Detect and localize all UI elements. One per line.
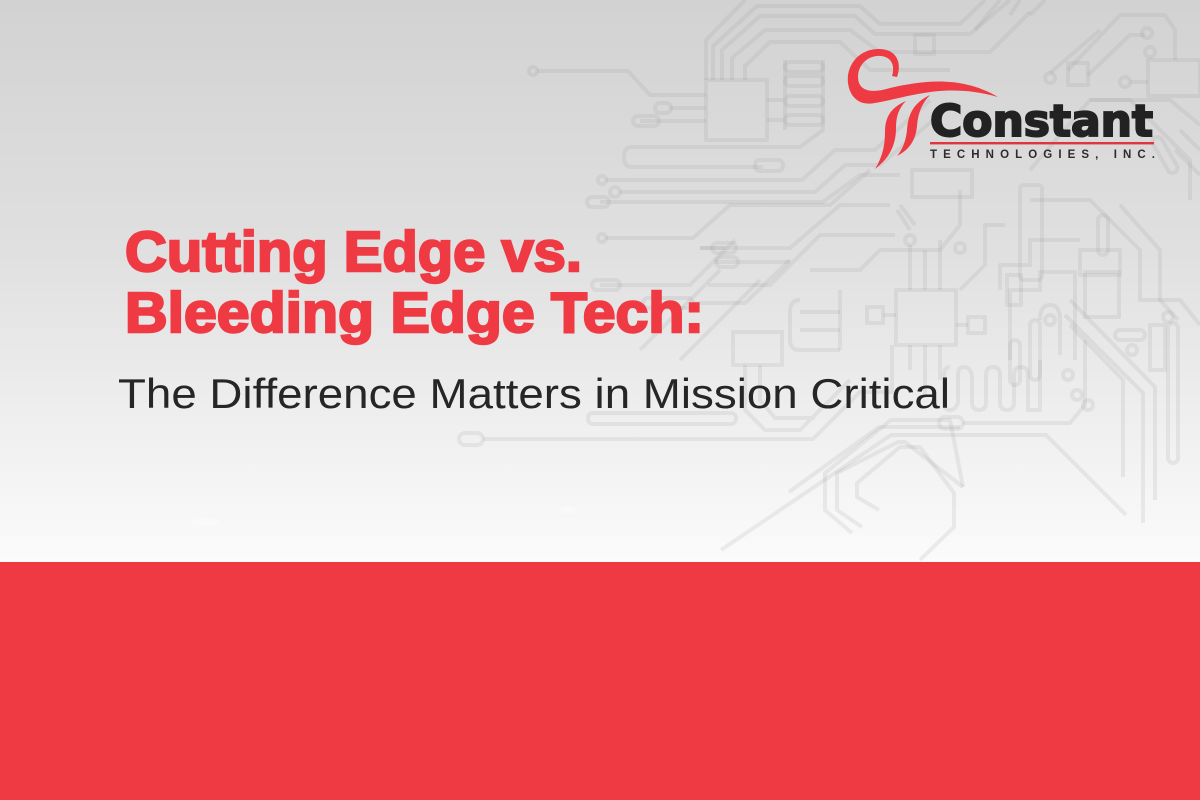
- subtitle: The Difference Matters in Mission Critical: [118, 370, 950, 417]
- logo tagline: TECHNOLOGIES, INC.: [930, 149, 1155, 161]
- red footer band: [0, 562, 1200, 800]
- logo underline: [930, 142, 1154, 144]
- faint smudges near lower background: [191, 506, 576, 526]
- circuit board pattern: [459, 0, 1200, 560]
- title: [125, 220, 704, 345]
- panel: grey gradient background: [0, 0, 1200, 562]
- title: Bleeding Edge Tech:: [125, 281, 704, 345]
- title: Cutting Edge vs.: [125, 220, 582, 284]
- logo wordmark: Constant: [930, 96, 1153, 147]
- icon: red swoosh T mark: [848, 49, 998, 169]
- logo: Constant Technologies: [848, 49, 1155, 169]
